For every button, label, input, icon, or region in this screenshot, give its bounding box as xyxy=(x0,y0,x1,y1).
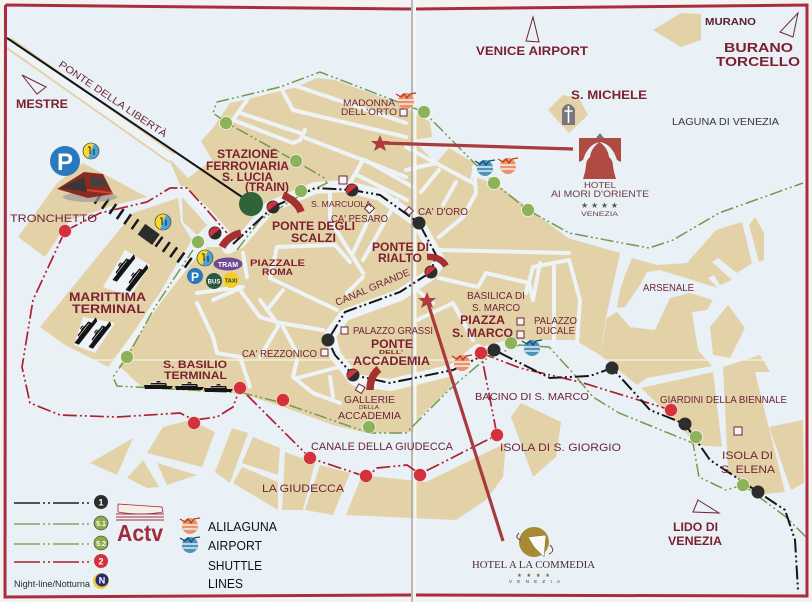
label Ponte degli Scalzi: SCALZI xyxy=(291,231,336,245)
icon: airport xyxy=(180,537,200,553)
island: far east xyxy=(769,420,804,490)
logo: Actv xyxy=(116,504,164,546)
area: small quay west of station xyxy=(182,197,207,235)
icon: San Michele cemetery xyxy=(562,104,575,125)
label Stazione: (TRAIN) xyxy=(245,180,289,194)
label Murano: MURANO xyxy=(705,17,756,28)
label Ca' Rezzonico: CA' REZZONICO xyxy=(242,349,317,360)
icon: station xyxy=(239,192,263,216)
label Burano Torcello: TORCELLO xyxy=(716,54,800,69)
area: Marittima xyxy=(40,198,192,367)
black stops xyxy=(322,216,764,498)
hotel name: HOTEL A LA COMMEDIA xyxy=(472,560,596,571)
label Madonna dell'Orto: MADONNA xyxy=(343,98,396,109)
logo: Hotel Ai Mori d'Oriente: AI MORI D'ORIENTE xyxy=(551,189,649,199)
island: San Giorgio xyxy=(511,403,561,477)
label Stazione xyxy=(206,147,289,194)
Grand Canal xyxy=(228,186,478,385)
label La Giudecca: LA GIUDECCA xyxy=(262,483,345,495)
legend line 2: 2 xyxy=(98,556,104,566)
label S. Marcuola: S. MARCUOLA xyxy=(311,200,372,209)
icon: park and boat A xyxy=(83,143,99,159)
label Ponte dell'Accademia: PONTE xyxy=(371,337,413,351)
main island xyxy=(118,78,620,433)
label Piazzale Roma xyxy=(250,258,305,277)
label Piazza S. Marco: S. MARCO xyxy=(452,326,513,340)
label Piazza S. Marco xyxy=(452,313,513,340)
label Piazzale Roma: ROMA xyxy=(262,267,294,277)
icon: parking: P xyxy=(57,149,73,176)
icon: bus xyxy=(206,273,222,289)
west canals xyxy=(197,253,323,387)
route 2 red line xyxy=(22,188,671,477)
green stops xyxy=(120,106,750,492)
area: Arsenale xyxy=(617,222,752,308)
hotel stars: ★★★★ xyxy=(581,201,618,210)
label Piazzale Roma: PIAZZALE xyxy=(250,258,305,268)
label Stazione: FERROVIARIA xyxy=(206,159,289,173)
icon: park and boat C xyxy=(197,250,213,266)
island east of Arsenale xyxy=(710,305,745,358)
label Marittima Terminal xyxy=(69,290,146,316)
label Basilica di S. Marco xyxy=(467,291,525,314)
icon: train xyxy=(57,172,117,202)
island: San Michele xyxy=(548,95,588,133)
icon: Alilaguna stop Madonna xyxy=(396,93,416,109)
label Stazione: S. LUCIA xyxy=(222,170,273,184)
label Canal Grande: CANAL GRANDE xyxy=(334,267,412,309)
label Ponte dell'Accademia xyxy=(353,337,430,368)
label Laguna di Venezia: LAGUNA DI VENEZIA xyxy=(672,117,779,128)
icon: park and boat B xyxy=(155,214,171,230)
label Palazzo Ducale: PALAZZO xyxy=(534,316,577,327)
label Ponte di Rialto: PONTE DI xyxy=(372,240,429,254)
label Tronchetto: TRONCHETTO xyxy=(10,213,98,225)
logo: Hotel Ai Mori d'Oriente xyxy=(551,133,649,218)
mask mark xyxy=(517,527,553,557)
cruise ships at San Basilio xyxy=(144,381,233,392)
label Canale della Giudecca: CANALE DELLA GIUDECCA xyxy=(311,441,454,453)
hotel pointer lines xyxy=(380,143,573,541)
ferry icon xyxy=(116,504,164,520)
canal network xyxy=(118,83,580,403)
hotel city: VENEZIA xyxy=(509,579,560,584)
hotel stars: ★★★★ xyxy=(517,572,550,579)
label Mestre: MESTRE xyxy=(16,97,68,111)
icon: bus: BUS xyxy=(208,280,220,286)
San Marco canals xyxy=(417,250,580,343)
label S. Basilio Terminal: TERMINAL xyxy=(164,370,227,382)
icon: airport stop north xyxy=(475,160,495,176)
route 1 black line xyxy=(233,188,798,590)
fold lines xyxy=(411,0,413,602)
label Ponte dell'Accademia: ACCADEMIA xyxy=(353,354,430,368)
cruise ships at Marittima xyxy=(71,251,150,350)
star markers xyxy=(371,135,436,308)
label Basilica di S. Marco: S. MARCO xyxy=(472,303,520,314)
island: Tronchetto xyxy=(18,163,147,257)
label Lido di Venezia: VENEZIA xyxy=(668,534,722,548)
legend night line: Night-line/Notturna xyxy=(14,579,90,589)
green lines xyxy=(113,72,806,537)
label Ponte dell'Accademia: DELL' xyxy=(379,350,403,356)
Accademia canals xyxy=(293,360,347,403)
label Gallerie dell'Accademia xyxy=(338,395,401,422)
label Gallerie dell'Accademia: DELLA xyxy=(359,405,380,411)
icon: small parking: P xyxy=(191,270,199,284)
label Ponte di Rialto xyxy=(372,240,429,265)
icon: taxi xyxy=(223,272,239,288)
label Gallerie dell'Accademia: ACCADEMIA xyxy=(338,411,401,422)
island: Sant'Elena xyxy=(723,355,785,495)
legend line 1: 1 xyxy=(98,498,104,508)
cruise basins xyxy=(74,250,150,353)
area: Arsenale east jetty xyxy=(749,217,764,262)
icon: Alilaguna xyxy=(180,518,200,534)
logo: Hotel a la Commedia xyxy=(472,527,596,584)
label Marittima Terminal: MARITTIMA xyxy=(69,290,146,304)
landmark squares xyxy=(321,109,742,435)
label Burano Torcello: BURANO xyxy=(724,40,793,55)
label S. Basilio Terminal xyxy=(163,359,227,382)
label Bacino di S. Marco: BACINO DI S. MARCO xyxy=(475,392,589,403)
legend text: Airport: AIRPORT xyxy=(208,538,262,553)
label Palazzo Ducale: DUCALE xyxy=(536,326,575,337)
hotel name: HOTEL xyxy=(584,181,617,190)
legend text: Shuttle: SHUTTLE xyxy=(208,558,262,573)
legend line 5.1: 5.1 xyxy=(96,521,106,528)
icon: Alilaguna stop north xyxy=(498,158,518,174)
label S. Michele: S. MICHELE xyxy=(571,88,647,102)
label Gallerie dell'Accademia: GALLERIE xyxy=(344,395,395,406)
area: station xyxy=(168,157,245,240)
label Isola di S. Elena: ISOLA DI xyxy=(722,450,773,462)
legend line 5.2: 5.2 xyxy=(96,541,106,548)
central northeast canals xyxy=(406,147,476,237)
label Madonna dell'Orto xyxy=(341,98,397,118)
label Arsenale: ARSENALE xyxy=(643,283,694,294)
direction triangles xyxy=(22,13,798,513)
icon: small parking xyxy=(187,268,203,284)
label S. Basilio Terminal: S. BASILIO xyxy=(163,359,227,371)
label Lido di Venezia xyxy=(668,520,722,548)
causeway: Ponte della Libertà xyxy=(7,38,242,197)
label Ponte della Libertà: PONTE DELLA LIBERTÀ xyxy=(56,58,170,140)
label Palazzo Grassi: PALAZZO GRASSI xyxy=(353,326,433,337)
icon: taxi: TAXI xyxy=(225,278,238,284)
legend night line xyxy=(14,573,109,589)
label Marittima Terminal: TERMINAL xyxy=(72,302,145,316)
label Palazzo Ducale xyxy=(534,316,577,337)
label Giardini della Biennale: GIARDINI DELLA BIENNALE xyxy=(660,395,787,406)
label Lido di Venezia: LIDO DI xyxy=(673,520,718,534)
icon: airport stop San Marco xyxy=(522,340,542,356)
logo mark xyxy=(579,133,621,179)
label Venice Airport: VENICE AIRPORT xyxy=(476,44,589,58)
legend night line: N xyxy=(99,576,105,586)
red and black stops xyxy=(208,184,438,382)
wordmark: Actv xyxy=(117,520,163,546)
bridges xyxy=(222,195,446,390)
island: Murano xyxy=(653,13,701,47)
label Madonna dell'Orto: DELL'ORTO xyxy=(341,107,397,118)
area: Giardini xyxy=(641,372,722,447)
legend text: Alilaguna: ALILAGUNA xyxy=(208,519,277,534)
legend: routes xyxy=(14,495,109,589)
label Basilica di S. Marco: BASILICA DI xyxy=(467,291,525,302)
label Isola di S. Elena: S. ELENA xyxy=(721,464,776,476)
icon: parking xyxy=(50,146,80,176)
icon: Alilaguna stop Zattere xyxy=(452,355,472,371)
label Ponte degli Scalzi xyxy=(272,219,355,245)
hotel city: VENEZIA xyxy=(581,211,619,218)
island: Giudecca blocks xyxy=(90,420,506,520)
label Ca' d'Oro: CA' D'ORO xyxy=(418,207,468,218)
label Piazza S. Marco: PIAZZA xyxy=(460,313,505,327)
label Ponte degli Scalzi: PONTE DEGLI xyxy=(272,219,355,233)
label Stazione: STAZIONE xyxy=(217,147,278,161)
crossing bars xyxy=(97,198,190,264)
red stops xyxy=(58,224,678,482)
label Ca' Pesaro: CA' PESARO xyxy=(331,214,388,225)
label Burano Torcello xyxy=(716,40,800,69)
legend: shuttle lines xyxy=(180,518,277,591)
water inlet by the station xyxy=(183,190,227,235)
area: Castello xyxy=(600,293,713,385)
legend text: Lines: LINES xyxy=(208,576,243,591)
San Polo canals xyxy=(270,193,397,310)
icon: tram: TRAM xyxy=(218,262,238,269)
label Ponte di Rialto: RIALTO xyxy=(378,251,422,265)
icon: tram xyxy=(214,258,242,270)
label Isola di S. Elena xyxy=(721,450,776,476)
northern canals xyxy=(233,83,413,200)
label Isola di S. Giorgio: ISOLA DI S. GIORGIO xyxy=(500,442,621,454)
